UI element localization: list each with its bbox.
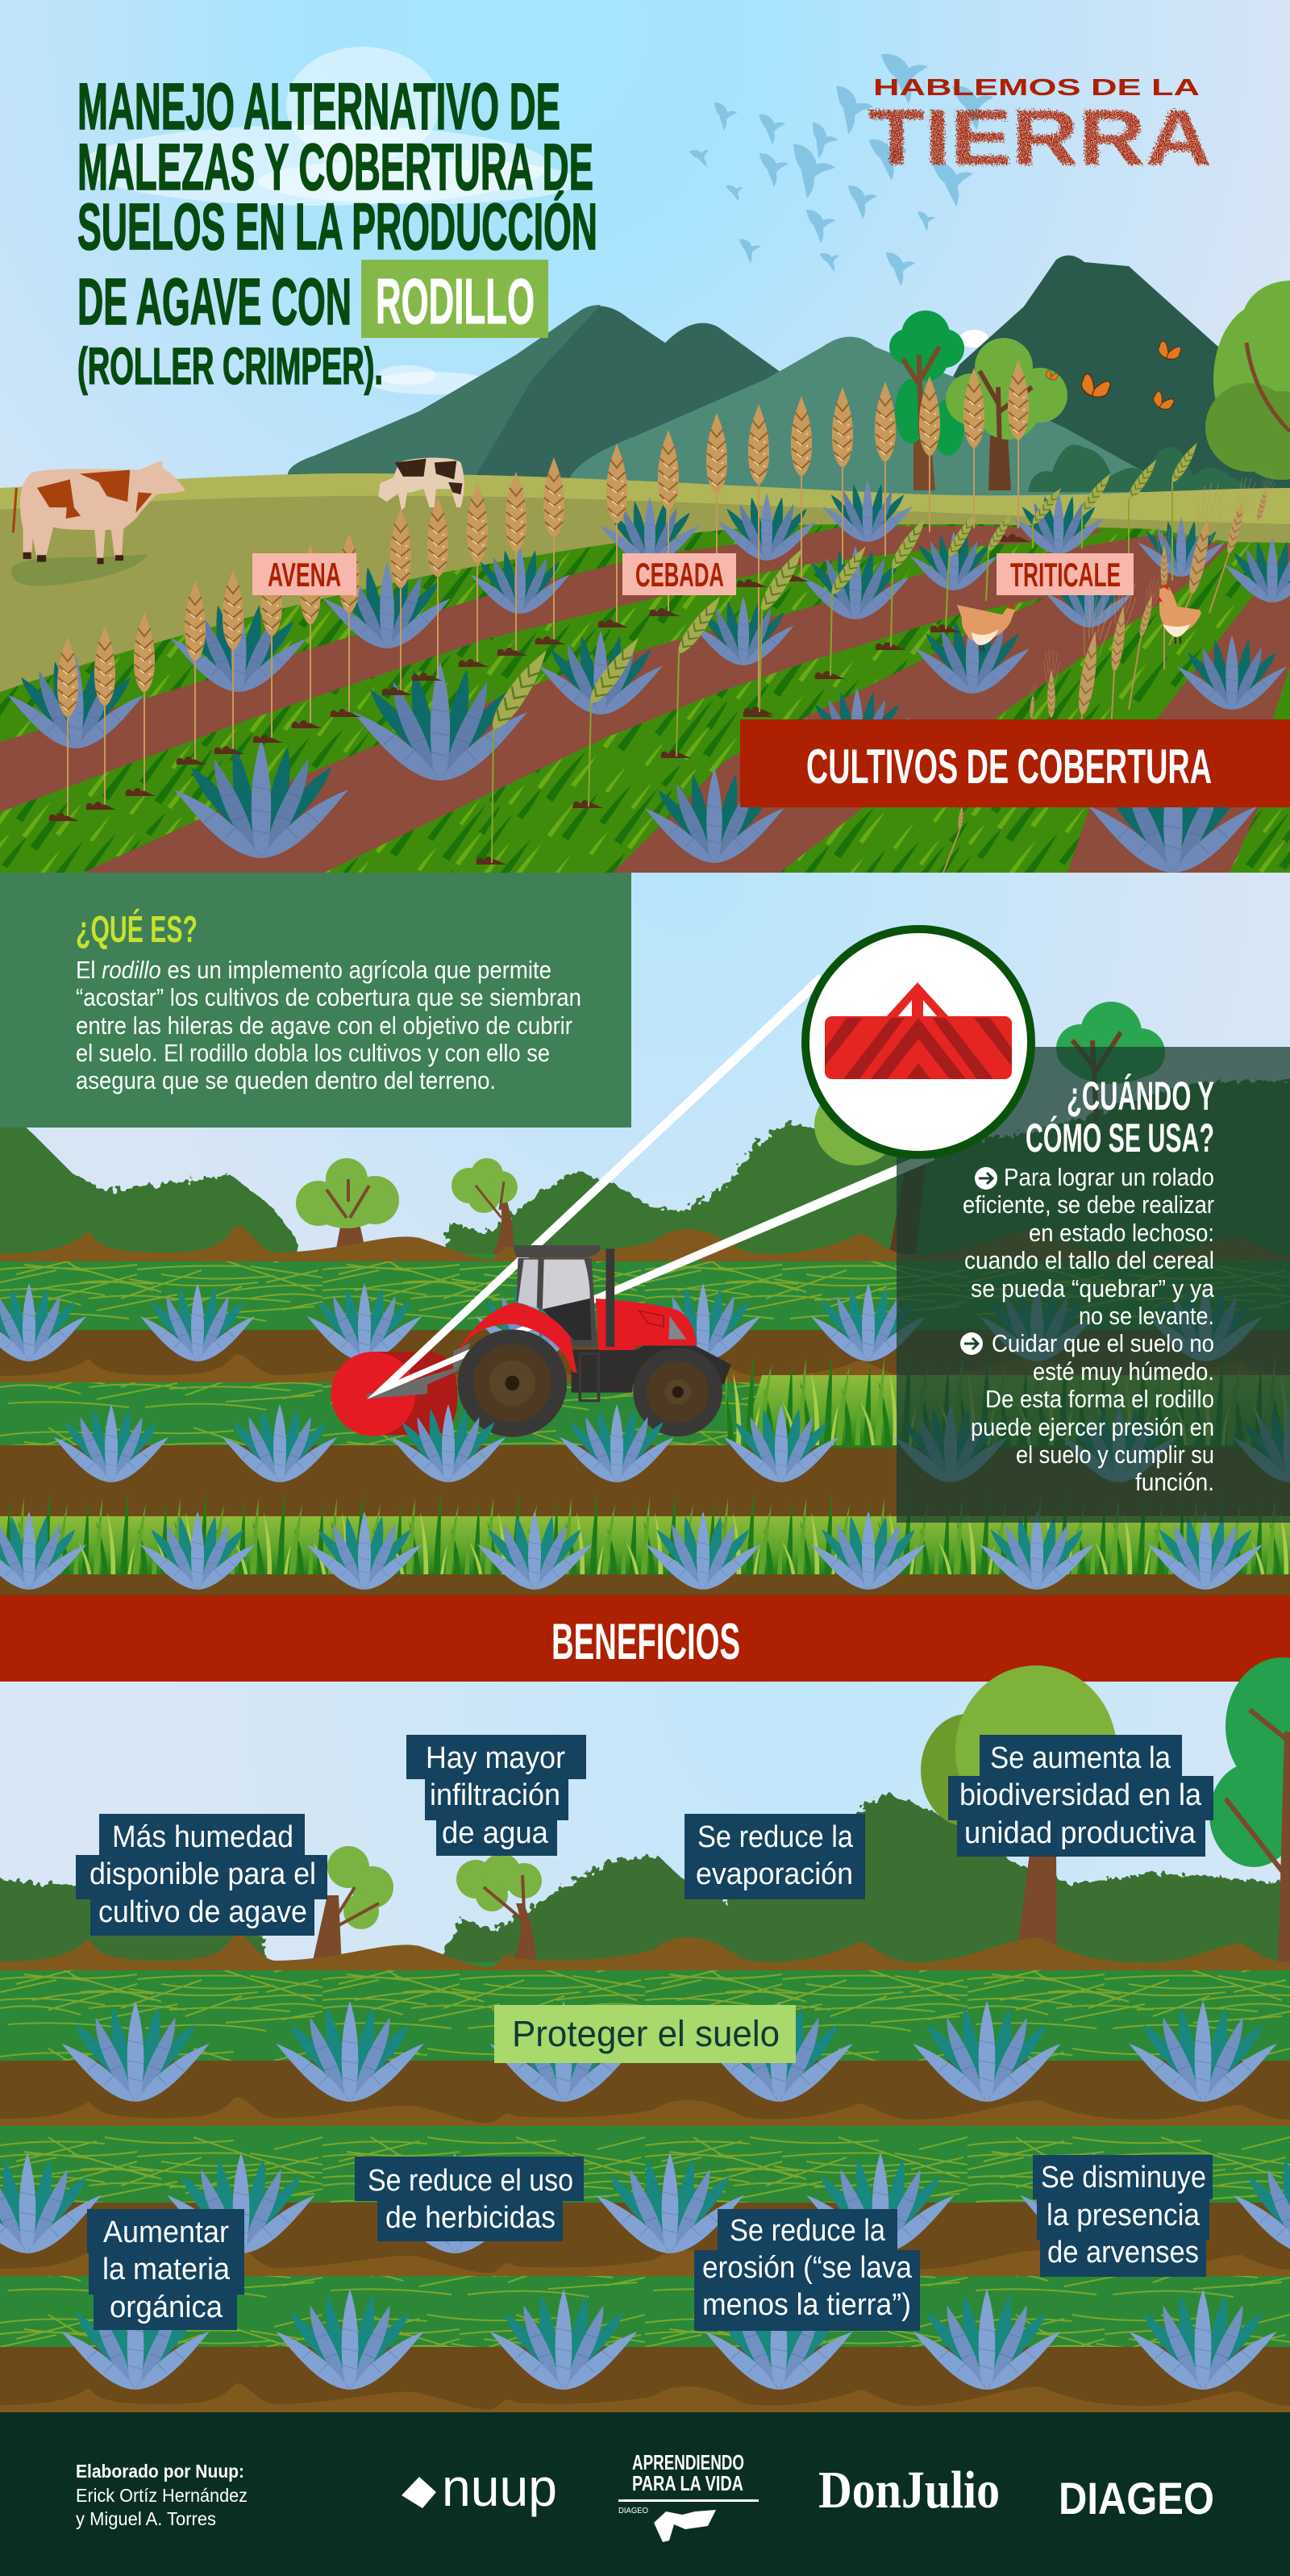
tree: large right edge	[1205, 281, 1290, 480]
footer	[0, 2412, 1290, 2576]
tree: light green	[946, 338, 1067, 490]
hen right	[1158, 584, 1201, 644]
tree behind magnifier, dark green	[814, 1002, 1165, 1266]
tree: large	[921, 1665, 1117, 1980]
credits: Elaborado por Nuup:	[76, 2461, 244, 2482]
tree: dark green	[889, 311, 964, 490]
ground line with mounds	[0, 1226, 1290, 1264]
tree: right edge	[1209, 1657, 1290, 1968]
body text: cuándo y cómo: Para lograr un rolado	[1004, 1163, 1214, 1191]
cow, light with orange spots	[11, 461, 185, 586]
label: avena	[252, 553, 356, 595]
benefit: arvenses	[1033, 2155, 1213, 2277]
hills	[0, 473, 1290, 565]
benefit: materia orgánica: la materia	[102, 2253, 231, 2286]
triticale plants	[943, 471, 1277, 873]
agave row, front	[0, 1511, 1263, 1590]
title highlight: rodillo	[361, 260, 548, 338]
panel: qué es	[0, 873, 631, 1128]
title: (ROLLER CRIMPER).	[77, 337, 383, 395]
tree: small canopy	[452, 1158, 518, 1258]
tractor	[457, 1245, 731, 1437]
logo: don julio: DonJulio	[818, 2461, 1000, 2520]
benefit: biodiversidad: biodiversidad en la	[959, 1778, 1202, 1812]
body text: cuándo y cómo: eficiente, se debe realizar	[963, 1190, 1214, 1219]
butterflies	[1045, 340, 1182, 412]
tree: small left	[311, 1846, 393, 1968]
logo: hablemos de la tierra: HABLEMOS DE LA	[873, 75, 1200, 101]
label: avena: AVENA	[268, 556, 341, 594]
benefit: erosión	[694, 2209, 920, 2331]
central label: proteger el suelo: Proteger el suelo	[512, 2013, 780, 2054]
field with grass	[0, 524, 1290, 873]
barley plants	[485, 440, 1201, 863]
label: cebada: CEBADA	[635, 556, 724, 594]
icon: arrow bullet one	[975, 1167, 997, 1190]
body text: cuándo y cómo: De esta forma el rodillo	[985, 1385, 1214, 1413]
body text: qué es: el suelo. El rodillo dobla los cultivos y con ello se	[76, 1039, 550, 1067]
forest silhouette	[0, 1794, 1290, 1968]
title: MANEJO ALTERNATIVO DE	[77, 70, 560, 144]
banner: beneficios	[0, 1595, 1290, 1682]
tree: small center	[456, 1853, 542, 1970]
logo: aprendiendo para la vida: PARA LA VIDA	[632, 2471, 743, 2495]
body text: cuándo y cómo: el suelo y cumplir su	[1016, 1440, 1214, 1469]
distant bushes	[1028, 444, 1258, 492]
roller	[331, 1343, 471, 1436]
benefit: herbicidas: de herbicidas	[385, 2201, 556, 2235]
benefit: arvenses: de arvenses	[1047, 2236, 1199, 2270]
panel: cuándo y cómo se usa	[897, 1047, 1290, 1523]
benefit: biodiversidad	[948, 1735, 1213, 1857]
hen left	[957, 603, 1015, 652]
benefit: infiltración: de agua	[442, 1816, 549, 1850]
mountains	[288, 256, 1290, 500]
body text: qué es: entre las hileras de agave con el objetivo de cubrir	[76, 1011, 572, 1040]
title: SUELOS EN LA PRODUCCIÓN	[77, 190, 597, 264]
benefit: arvenses: la presencia	[1047, 2199, 1201, 2232]
forest silhouette	[0, 1081, 1290, 1266]
benefit: infiltración: Hay mayor	[426, 1741, 565, 1775]
panel: scene, sky and field	[0, 0, 1290, 873]
oat plants	[49, 360, 1031, 865]
agave rows	[0, 2001, 1290, 2390]
benefit: erosión: Se reduce la	[730, 2214, 886, 2248]
benefit: infiltración: infiltración	[430, 1778, 560, 1812]
body text: qué es: asegura que se queden dentro del terreno.	[76, 1066, 496, 1094]
benefit: biodiversidad: Se aumenta la	[990, 1741, 1171, 1775]
label: triticale: TRITICALE	[1010, 556, 1121, 594]
benefit: más humedad: Más humedad	[112, 1820, 293, 1854]
icon: roller crimper	[825, 982, 1012, 1079]
body text: qué es: El rodillo es un implemento agrícola que permite	[76, 956, 551, 984]
ground line with mounds	[0, 1934, 1290, 1972]
benefit: materia orgánica	[87, 2209, 244, 2330]
body text: qué es: “acostar” los cultivos de cobertura que se siembran	[76, 983, 581, 1011]
benefit: erosión: menos la tierra”)	[702, 2288, 911, 2322]
benefit: evaporación: evaporación	[696, 1857, 853, 1891]
benefit: arvenses: Se disminuye	[1041, 2161, 1206, 2195]
logo: aprendiendo para la vida: DIAGEO	[618, 2507, 648, 2516]
benefit: herbicidas: Se reduce el uso	[368, 2164, 573, 2198]
credits	[76, 2461, 248, 2529]
title: MALEZAS Y COBERTURA DE	[77, 131, 593, 204]
callout lines to magnifier	[367, 974, 935, 1399]
body text: qué es	[76, 956, 581, 1094]
body text: cuándo y cómo: Cuidar que el suelo no	[992, 1329, 1214, 1357]
benefit: infiltración	[406, 1735, 586, 1856]
logo: aprendiendo para la vida	[618, 2450, 759, 2542]
agave plants	[8, 481, 1290, 873]
title	[77, 70, 597, 395]
flock of birds	[689, 54, 993, 287]
clouds	[81, 47, 988, 394]
body text: cuándo y cómo: no se levante.	[1079, 1302, 1214, 1330]
benefit: más humedad: disponible para el	[89, 1857, 316, 1891]
magnifier with roller icon	[805, 929, 1031, 1155]
body text: cuándo y cómo	[963, 1163, 1215, 1496]
body text: cuándo y cómo: cuando el tallo del cereal	[964, 1246, 1214, 1274]
benefit: más humedad	[76, 1814, 327, 1936]
agave row, middle	[54, 1404, 1290, 1482]
benefit: biodiversidad: unidad productiva	[964, 1816, 1196, 1850]
title: DE AGAVE CON	[77, 265, 352, 339]
logo: aprendiendo para la vida: APRENDIENDO	[632, 2450, 744, 2474]
agave row, back	[0, 1283, 1263, 1361]
icon: arrow bullet two	[960, 1332, 983, 1355]
body text: cuándo y cómo: puede ejercer presión en	[971, 1413, 1214, 1441]
benefit: evaporación: Se reduce la	[697, 1820, 854, 1854]
logo: diageo: DIAGEO	[1059, 2473, 1214, 2524]
logo: hablemos de la tierra: TIERRA	[868, 94, 1212, 181]
benefit: evaporación	[685, 1814, 865, 1899]
icon: hand	[654, 2510, 716, 2542]
title highlight: rodillo: RODILLO	[376, 265, 535, 337]
banner: cultivos de cobertura	[740, 719, 1290, 807]
credits: Erick Ortíz Hernández	[76, 2485, 248, 2506]
cow, spotted grazing	[378, 458, 464, 511]
label: cebada	[622, 553, 736, 595]
panel: roller crimper scene	[0, 873, 1290, 1597]
benefit: erosión: erosión (“se lava	[702, 2251, 913, 2285]
credits: y Miguel A. Torres	[76, 2508, 216, 2529]
logo: nuup: nuup	[442, 2457, 557, 2517]
benefit: materia orgánica: orgánica	[110, 2290, 223, 2324]
benefit: materia orgánica: Aumentar	[103, 2215, 229, 2249]
soil furrows	[0, 526, 1290, 873]
banner: beneficios: BENEFICIOS	[551, 1614, 740, 1670]
benefit: herbicidas	[355, 2157, 584, 2241]
tree: left canopy	[296, 1158, 399, 1257]
logo: hablemos de la tierra	[868, 75, 1212, 181]
panel: benefits scene	[0, 1657, 1290, 2413]
body text: cuándo y cómo: en estado lechoso:	[1029, 1219, 1214, 1247]
body text: cuándo y cómo: se pueda “quebrar” y ya	[971, 1274, 1215, 1303]
straw and soil bands	[0, 1970, 1290, 2413]
straw and soil bands	[0, 1261, 1290, 1597]
label: triticale	[997, 553, 1134, 595]
body text: cuándo y cómo: función.	[1135, 1468, 1214, 1496]
central label: proteger el suelo	[494, 2005, 796, 2063]
body text: cuándo y cómo: esté muy húmedo.	[1033, 1357, 1214, 1386]
benefit: más humedad: cultivo de agave	[98, 1895, 307, 1929]
panel: qué es: ¿QUÉ ES?	[76, 908, 198, 950]
grass strip between furrows	[324, 598, 1046, 873]
